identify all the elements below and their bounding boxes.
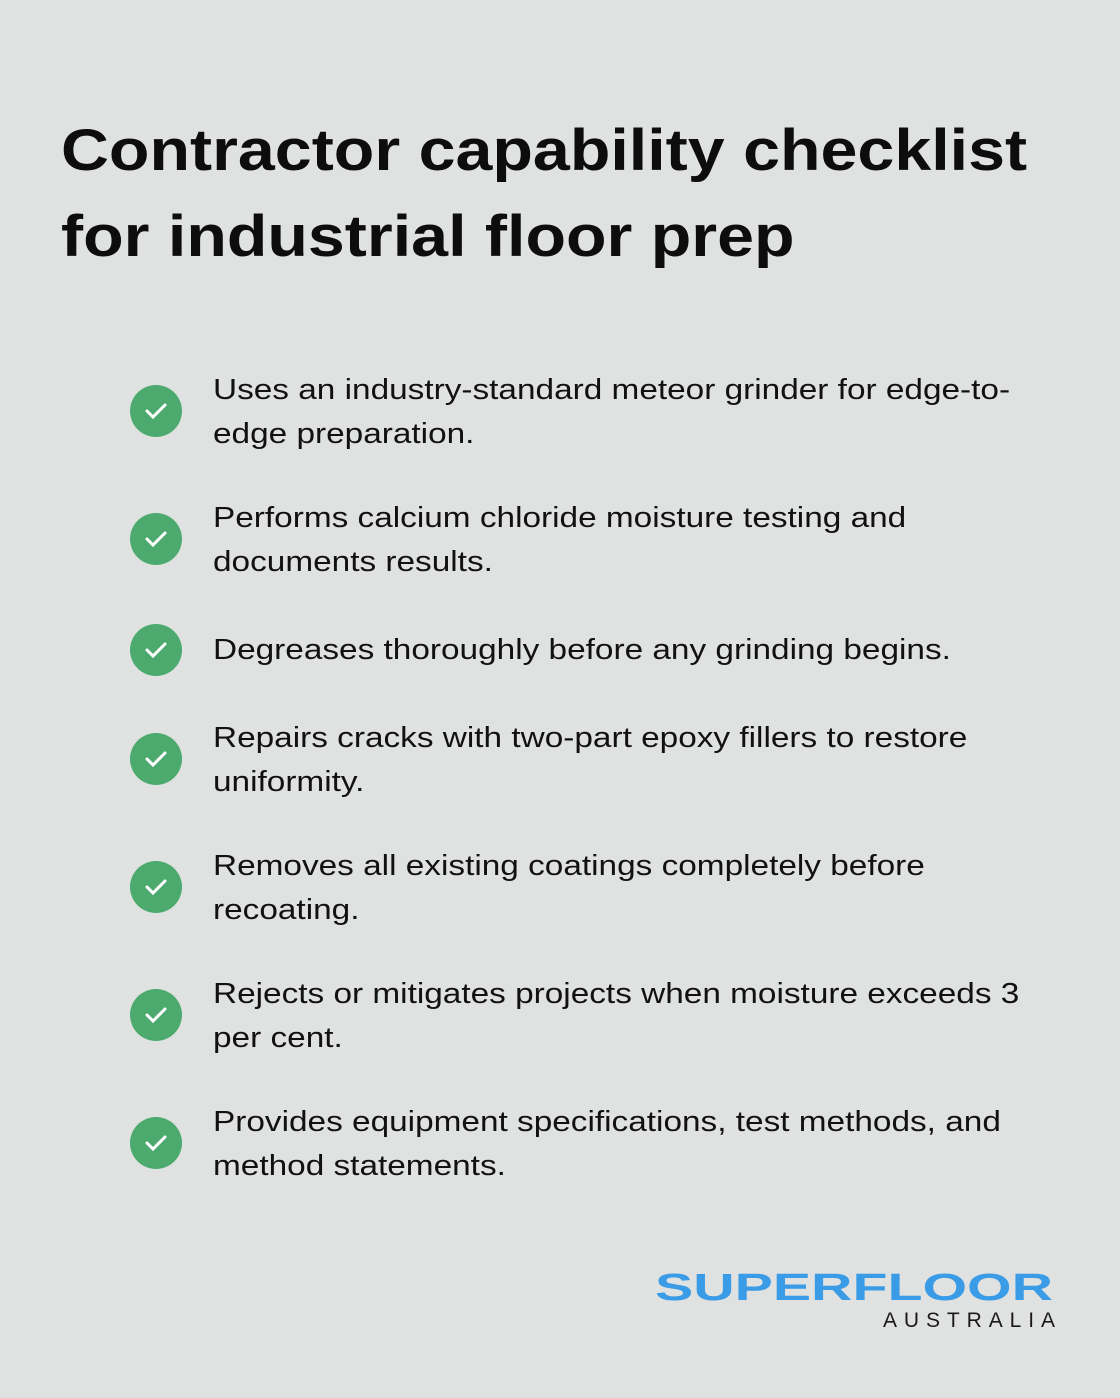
logo [655,1267,1055,1332]
title: for industrial floor prep [61,204,795,269]
text: Rejects or mitigates projects when moisture exceeds 3 [213,978,1019,1010]
text [213,502,906,578]
text: Removes all existing coatings completely before [213,850,925,882]
text: Performs calcium chloride moisture testing and [213,502,906,534]
text [213,1106,1001,1182]
item 2 [130,502,906,578]
text [213,722,967,798]
item 7 [130,1106,1001,1182]
icon: check [130,733,182,785]
title [61,118,1027,269]
item 3 [130,624,951,676]
text: documents results. [213,546,493,578]
text: method statements. [213,1150,506,1182]
text: Uses an industry-standard meteor grinder for edge-to- [213,374,1010,406]
item 5 [130,850,925,926]
icon: check [130,1117,182,1169]
title: Contractor capability checklist [61,118,1027,183]
text: edge preparation. [213,418,474,450]
icon: check [130,385,182,437]
icon: check [130,861,182,913]
text: per cent. [213,1022,343,1054]
text: Provides equipment specifications, test methods, and [213,1106,1001,1138]
item 6 [130,978,1019,1054]
logo: SUPERFLOOR [655,1267,1053,1309]
text [213,978,1019,1054]
item 1 [130,374,1010,450]
icon: check [130,513,182,565]
text: uniformity. [213,766,364,798]
icon: check [130,624,182,676]
text [213,850,925,926]
logo: AUSTRALIA [883,1309,1055,1332]
text: recoating. [213,894,359,926]
text: Degreases thoroughly before any grinding begins. [213,634,951,666]
text: Repairs cracks with two-part epoxy fillers to restore [213,722,967,754]
item 4 [130,722,967,798]
text [213,374,1010,450]
icon: check [130,989,182,1041]
